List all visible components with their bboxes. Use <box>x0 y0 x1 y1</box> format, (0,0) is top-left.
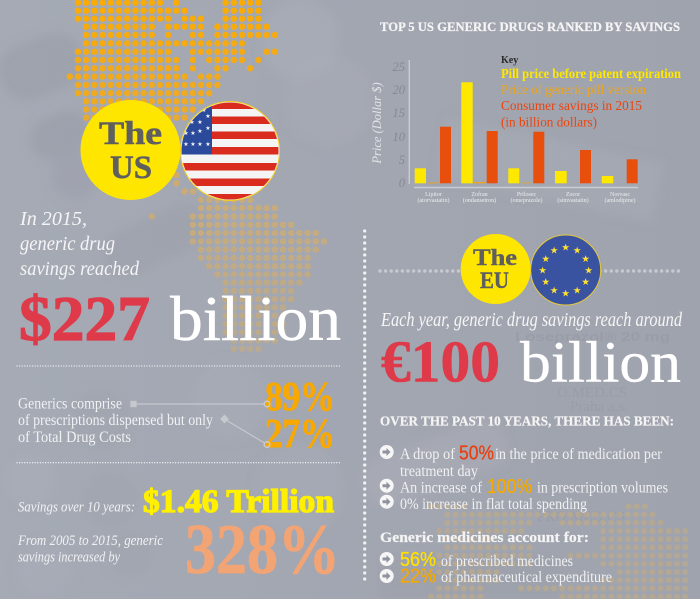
chart key: Pill price before patent expiration <box>501 67 681 82</box>
dot map: Europe <box>431 506 686 597</box>
y axis tick labels <box>392 60 406 190</box>
icon: EU flag: ★ <box>581 254 590 265</box>
chart axes <box>409 60 638 188</box>
list: generic medicines share: of pharmaceutical expenditure <box>441 569 612 586</box>
savings increase text <box>17 533 163 566</box>
chart key: Price of generic pill version <box>501 83 646 98</box>
background photo of pills: PRO.MED.CS <box>537 509 625 525</box>
savings over 10 years label: Savings over 10 years: <box>18 500 135 516</box>
generics share text: of Total Drug Costs <box>18 429 131 446</box>
heading: generic medicines account for: Generic medicines account for: <box>380 530 589 546</box>
icon: US flag: ★ <box>190 130 196 137</box>
connector lines to percentages <box>131 401 270 447</box>
icon: EU flag: ★ <box>584 266 593 276</box>
icon: US flag: ★ <box>183 141 189 148</box>
list: generic medicines share: of prescribed medicines <box>441 553 573 570</box>
icon: EU flag: ★ <box>550 286 558 296</box>
chart key <box>501 55 681 130</box>
x axis drug labels: (simvastatin) <box>557 197 589 204</box>
x axis drug labels: Zocor <box>566 192 580 198</box>
y axis tick labels: 5 <box>399 153 405 167</box>
x axis drug labels: Zofran <box>471 191 488 198</box>
savings increase text: From 2005 to 2015, generic <box>17 533 163 549</box>
list: changes over 10 years: in the price of medication per <box>495 446 663 463</box>
badge: The US: US <box>110 150 152 186</box>
red bars: consumer savings <box>440 127 638 183</box>
icon: US flag: ★ <box>197 141 203 148</box>
y axis tick labels: 10 <box>392 130 406 144</box>
icon: arrow bullets share <box>380 552 394 583</box>
icon: EU flag: ★ <box>542 277 550 288</box>
headline: €100 billion <box>381 329 681 395</box>
statistic: 89%: 89% <box>265 373 335 419</box>
x axis drug labels: Norvasc <box>610 192 630 198</box>
list: changes over 10 years: 50% <box>459 442 494 464</box>
x axis drug labels: (atorvastatin) <box>418 197 450 204</box>
headline: €100 billion: billion <box>520 330 681 395</box>
background photo of pills: Praha a.s. <box>570 399 628 415</box>
x axis drug labels: (amlodipine) <box>604 197 636 204</box>
intro text: In 2015 <box>19 208 140 280</box>
headline: $227 billion: billion <box>170 284 341 354</box>
list: changes over 10 years: An increase of <box>400 480 483 497</box>
y axis tick labels: 25 <box>392 60 405 74</box>
badge: The EU: The <box>473 245 517 270</box>
vertical dotted divider <box>363 231 366 582</box>
x axis drug labels: (ondansetron) <box>463 197 496 204</box>
icon: US flag <box>180 101 280 202</box>
yellow bars: pill price before patent expiration <box>415 82 613 183</box>
list: changes over 10 years <box>380 442 668 513</box>
headline: €100 billion: €100 <box>381 329 500 395</box>
icon: US flag: ★ <box>205 113 211 120</box>
generics share text: of prescriptions dispensed but only <box>18 412 213 429</box>
list: generic medicines share: 56% <box>400 549 436 571</box>
y axis tick labels: 20 <box>392 83 406 97</box>
list: generic medicines share <box>380 549 612 588</box>
savings increase text: savings increased by <box>18 550 120 566</box>
generics share text: Generics comprise <box>18 396 122 413</box>
statistic: 27%: 27% <box>265 410 335 456</box>
intro text: In 2015: In 2015, <box>19 208 87 230</box>
intro text: In 2015: savings reached <box>20 258 140 280</box>
orange bars: price of generic pill <box>428 182 532 183</box>
headline: $227 billion <box>19 284 341 354</box>
background photo of pills: O.MED.CS <box>557 385 627 401</box>
icon: US flag: ★ <box>183 130 189 137</box>
icon: US flag: ★ <box>205 141 211 148</box>
chart key: (in billion dollars) <box>501 116 597 130</box>
icon: US flag: ★ <box>205 125 211 132</box>
icon: EU flag: ★ <box>542 254 550 265</box>
bar chart: top 5 generic drugs <box>370 60 638 204</box>
background photo of pills: Loseprazol® 20 mg <box>515 329 670 344</box>
generics share text <box>18 396 213 446</box>
list: changes over 10 years: treatment day <box>400 463 478 480</box>
icon: EU flag <box>531 235 601 305</box>
icon: US flag: ★ <box>197 128 203 135</box>
statistic: $1.46 Trillion: $1.46 Trillion <box>143 484 334 520</box>
x axis drug labels: Lipitor <box>425 192 442 198</box>
chart key: Key <box>501 55 518 66</box>
chart title: TOP 5 US GENERIC DRUGS RANKED BY SAVINGS <box>380 20 680 34</box>
icon: US flag: ★ <box>189 119 195 126</box>
x axis drug labels <box>418 191 636 204</box>
statistic: 328%: 328% <box>185 511 340 589</box>
list: changes over 10 years: 100% <box>487 476 532 498</box>
y axis title: Price (Dollar $) <box>370 82 384 165</box>
x axis drug labels: Prilosec <box>517 192 536 198</box>
icon: EU flag: ★ <box>573 286 581 296</box>
icon: EU flag: ★ <box>550 246 558 256</box>
x axis drug labels: (omeprazole) <box>511 197 542 204</box>
icon: EU flag: ★ <box>581 277 590 288</box>
list: changes over 10 years: 0% increase in flat total spending <box>400 496 587 513</box>
badge: The EU <box>461 234 531 304</box>
intro text: In 2015: generic drug <box>20 233 115 255</box>
badge: The US <box>80 100 180 200</box>
icon: US flag: ★ <box>190 141 196 148</box>
badge: The US: The <box>99 116 162 152</box>
heading: over the past 10 years: OVER THE PAST 10 YEARS, THERE HAS BEEN: <box>380 414 674 429</box>
icon: EU flag: ★ <box>561 242 570 254</box>
icon: US flag: ★ <box>201 107 207 114</box>
list: changes over 10 years: A drop of <box>400 446 456 463</box>
icon: EU flag: ★ <box>561 288 570 300</box>
list: generic medicines share: 22% <box>400 566 436 588</box>
chart key: Consumer savings in 2015 <box>501 99 642 114</box>
badge: The EU: EU <box>480 268 509 293</box>
dot map: United States <box>70 3 324 349</box>
headline: $227 billion: $227 <box>19 284 150 354</box>
list: changes over 10 years: in prescription volumes <box>537 480 668 497</box>
icon: US flag: ★ <box>197 119 203 126</box>
icon: arrow bullets <box>380 445 394 509</box>
y axis tick labels: 0 <box>399 176 406 190</box>
y axis tick labels: 15 <box>392 106 405 120</box>
icon: EU flag: ★ <box>538 266 547 276</box>
icon: EU flag: ★ <box>573 246 581 256</box>
